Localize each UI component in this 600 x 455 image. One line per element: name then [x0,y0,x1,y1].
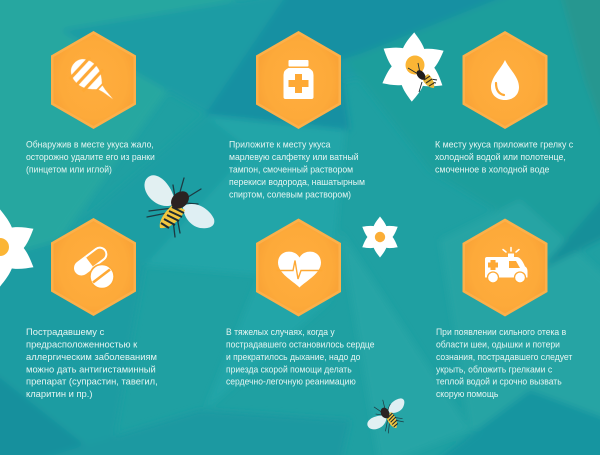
icon hexagon: medicine bottle [256,31,341,129]
text block: resuscitation: В тяжелых случаях, когда у [226,327,335,337]
text block: severe swelling: При появлении сильного отека в [436,327,566,337]
flower, left edge [0,209,40,287]
text block: apply a compress: тампон, смоченный раствором [229,164,353,175]
text block: remove the sting: Обнаружив в месте укуса жало, [26,139,154,150]
text block: antihistamine: аллергическим заболеваниям [26,352,157,362]
text block: antihistamine: Пострадавшему с [26,327,105,337]
flower with bee, top [376,31,450,103]
text block: apply a compress: перекиси водорода, нашатырным [229,177,365,187]
text block: resuscitation: и прекратилось дыхание, надо до [226,352,360,362]
icon: ambulance [485,248,528,283]
text block: apply a compress: марлевую салфетку или ватный [229,152,359,162]
text block: remove the sting: осторожно удалите его из ранки [26,152,155,162]
icon hexagon: ambulance [462,218,548,316]
icon hexagon: water drop [462,31,548,129]
icon: water drop [491,60,519,100]
text block: remove the sting: (пинцетом или иглой) [26,164,112,175]
text block: antihistamine: препарат (супрастин, тавегил, [26,377,158,386]
text block: resuscitation: сердечно-легочную реанимацию [226,376,356,387]
text block: resuscitation: приезда скорой помощи делать [226,364,352,375]
text block: severe swelling: области шеи, одышки и потери [436,339,560,350]
text block: severe swelling: сознания, пострадавшего следует [436,352,572,362]
bee, large [144,175,214,237]
text block: cold compress: смоченное в холодной воде [435,164,549,175]
bee, small [366,391,410,438]
icon hexagon: heart with pulse [256,218,341,316]
icon: heart with pulse [276,252,322,288]
text block: antihistamine: можно дать антигистаминный [26,365,156,374]
icon hexagon: sting [51,31,136,129]
text block: severe swelling: укрыть, обложить грелками с [436,364,553,375]
text block: severe swelling: скорую помощь [436,389,499,399]
icon hexagon: pills [51,218,136,316]
text block: cold compress: К месту укуса приложите грелку с [435,139,574,150]
icon: pills [71,244,115,290]
text block: severe swelling: теплой водой и срочно вызвать [436,376,562,387]
text block: cold compress: холодной водой или полотенце, [435,152,566,162]
icon: medicine bottle with cross [284,60,314,99]
text block: resuscitation: пострадавшего остановилось сердце [226,339,375,350]
bee on flower [408,63,437,92]
text block: apply a compress: спиртом, солевым раствором) [229,189,351,200]
flower, middle [359,217,401,257]
text block: apply a compress: Приложите к месту укуса [229,139,330,150]
text block: antihistamine: предрасположенностью к [26,340,138,349]
icon: sting [64,52,123,110]
text block: antihistamine: кларитин и пр.) [26,389,93,399]
